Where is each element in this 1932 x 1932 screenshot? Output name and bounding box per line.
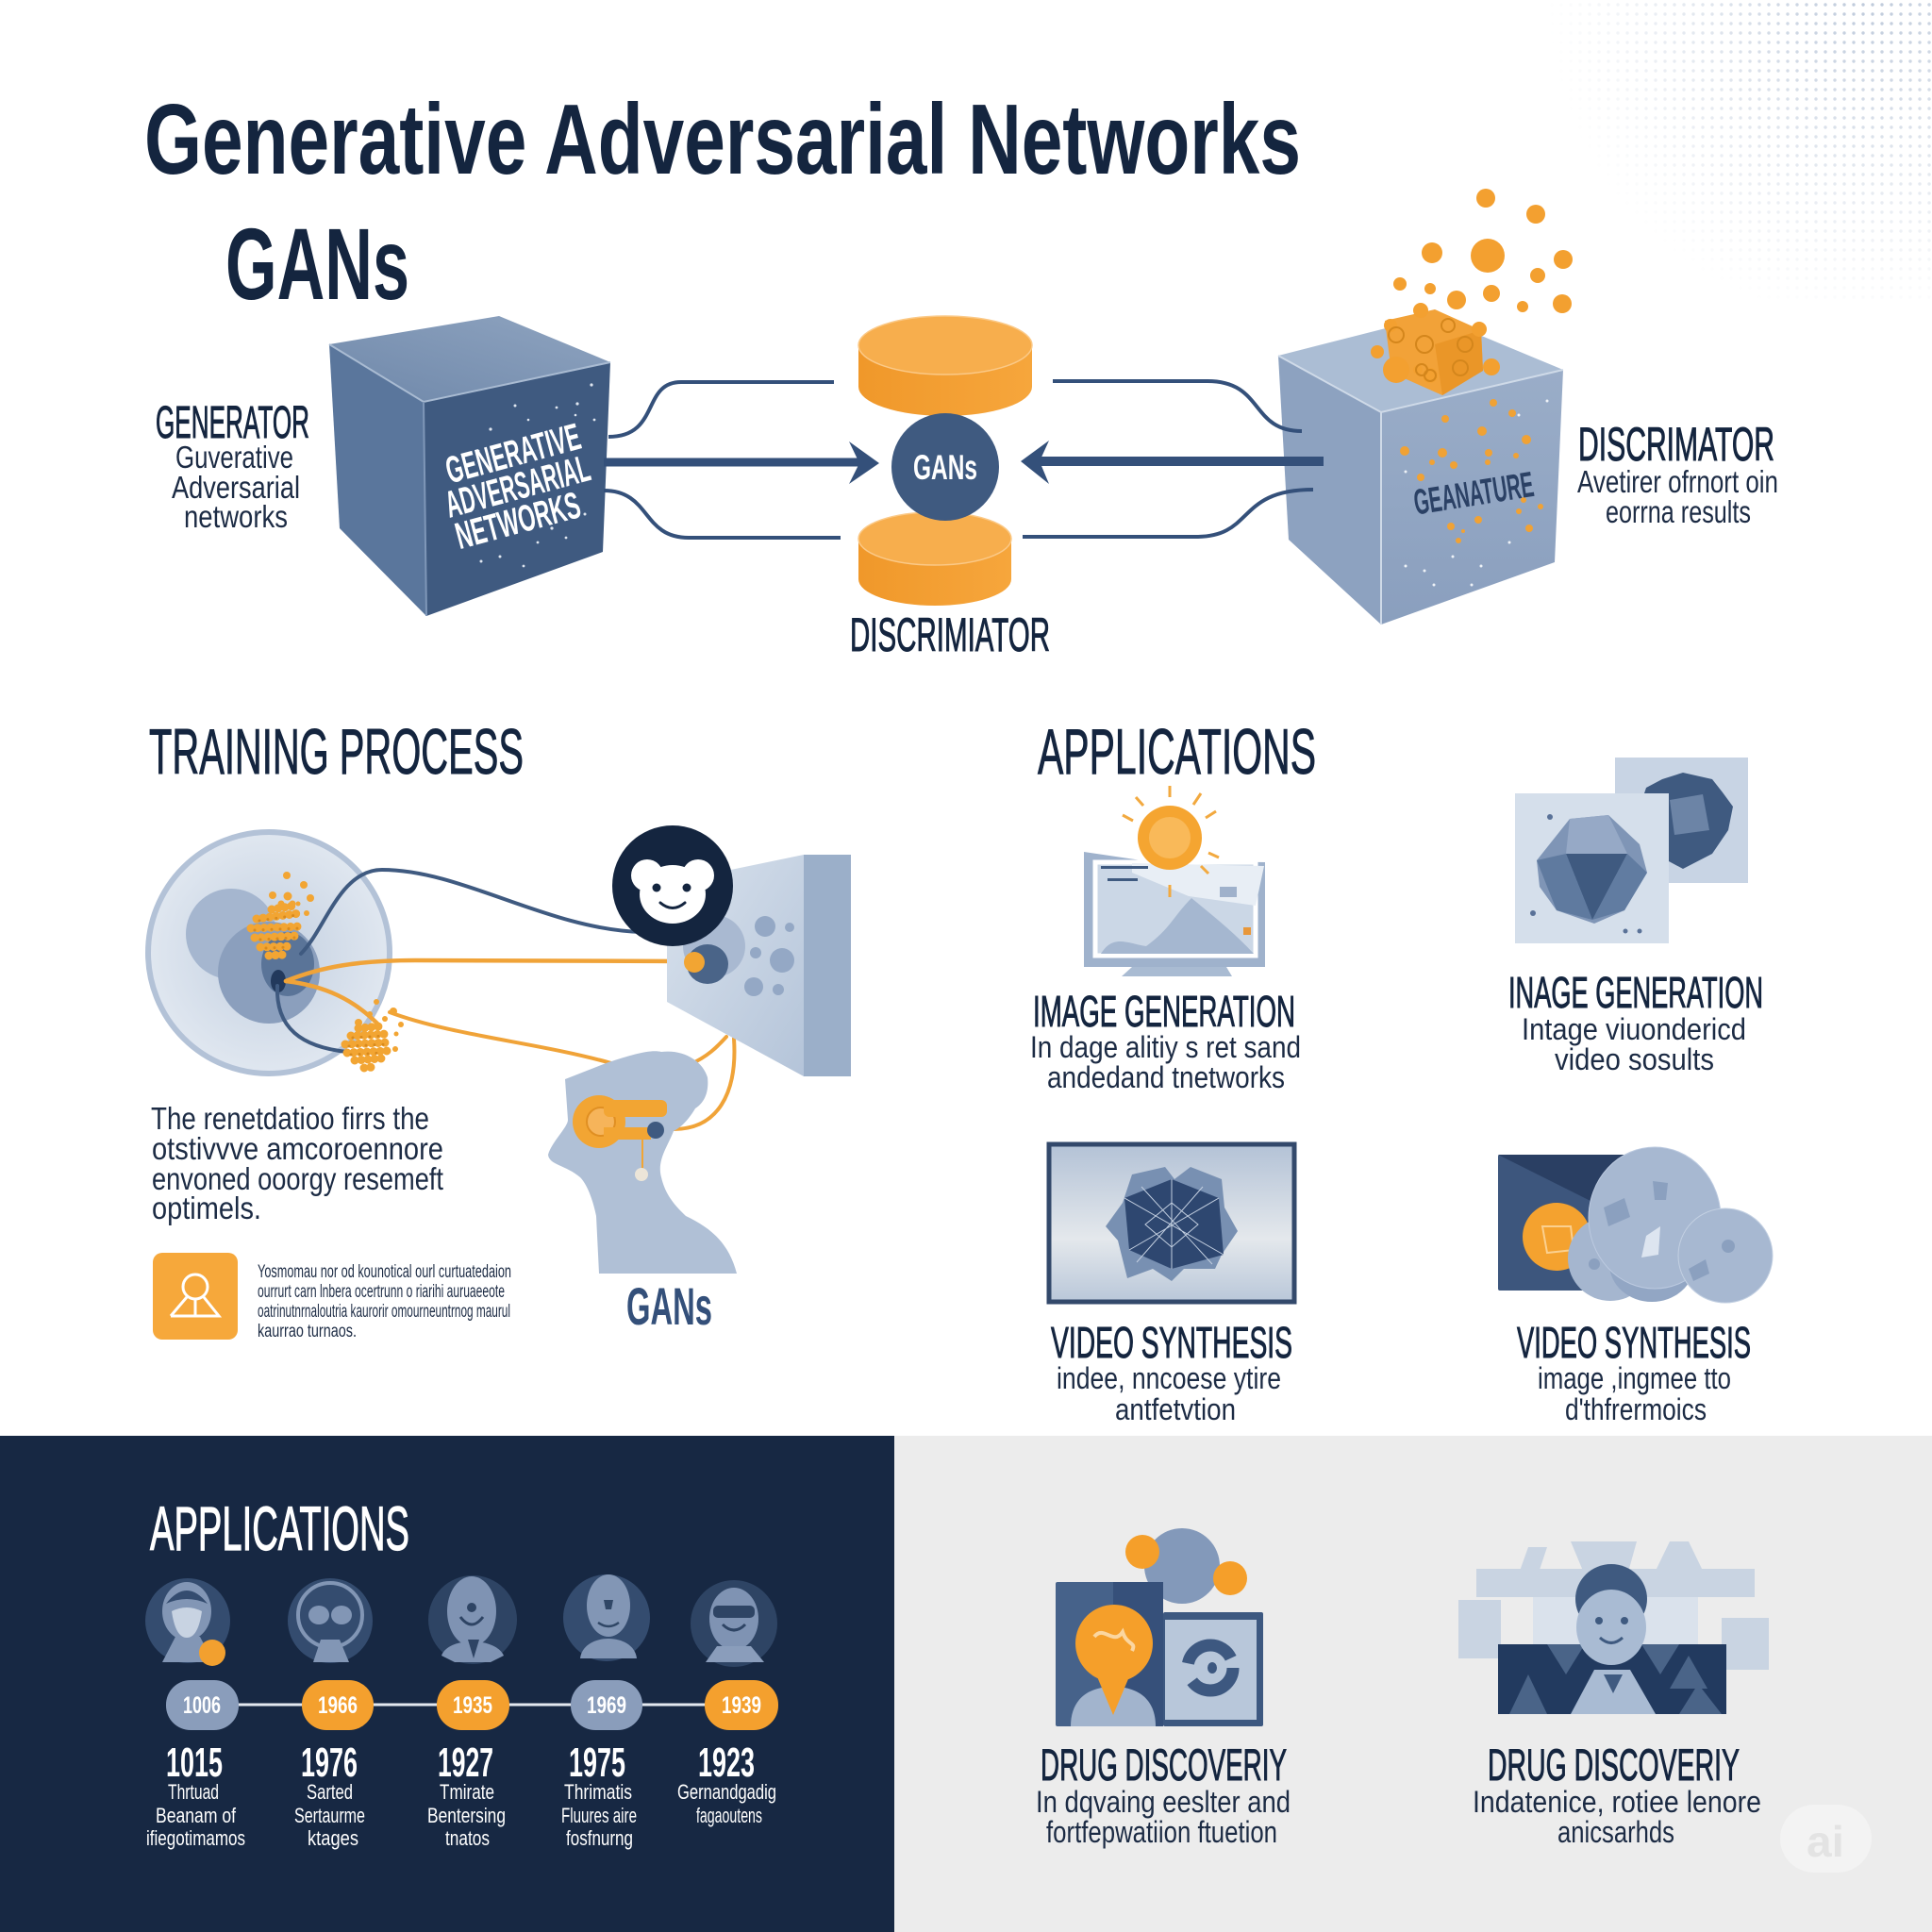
orange particle cluster bottom bbox=[345, 999, 404, 1068]
cube caption: GEANATURE bbox=[1411, 465, 1537, 524]
year pill 3 bbox=[437, 1680, 509, 1730]
timeline entry 5: fagaoutens bbox=[696, 1804, 762, 1827]
image generation text left: IMAGE GENERATION bbox=[1033, 987, 1295, 1036]
avatar 3 bbox=[428, 1575, 517, 1664]
orange data cube and particles bbox=[1371, 189, 1573, 395]
note text: ourrurt carn lnbera ocertrunn o riarihi auruaeeote bbox=[258, 1282, 505, 1302]
video synthesis text left: VIDEO SYNTHESIS bbox=[1051, 1318, 1292, 1367]
timeline entry 4: Fluures aire bbox=[561, 1804, 637, 1827]
drug discovery text right: anicsarhds bbox=[1557, 1815, 1674, 1849]
title: Generative Adversarial Networks bbox=[144, 84, 1301, 195]
avatar 1 bbox=[145, 1578, 230, 1666]
title: GANs bbox=[225, 207, 409, 321]
timeline entry 5: Gernandgadig bbox=[677, 1780, 776, 1804]
image generation text left: andedand tnetworks bbox=[1047, 1060, 1285, 1094]
central GANs discs bbox=[858, 316, 1032, 606]
timeline entry 3: 1927 bbox=[438, 1740, 493, 1786]
year pill 5 bbox=[705, 1680, 778, 1730]
avatar 5 bbox=[691, 1580, 777, 1667]
drug discovery text right bbox=[1473, 1740, 1761, 1849]
video synthesis text left bbox=[1051, 1318, 1292, 1426]
year pill 1: 1006 bbox=[183, 1692, 221, 1719]
video synthesis text right: image ,ingmee tto bbox=[1538, 1361, 1731, 1395]
discriminator label bbox=[1577, 418, 1778, 529]
note text: kaurrao turnaos. bbox=[258, 1322, 357, 1341]
image generation text right: INAGE GENERATION bbox=[1508, 968, 1763, 1017]
timeline entry 2: 1976 bbox=[301, 1740, 358, 1786]
cube caption: NETWORKS bbox=[451, 485, 585, 558]
drug discovery text left: DRUG DISCOVERIY bbox=[1041, 1740, 1287, 1790]
timeline entry 1: 1015 bbox=[166, 1740, 223, 1786]
watermark badge bbox=[1780, 1805, 1872, 1873]
connectors: discriminator to GANs bbox=[1023, 381, 1313, 537]
video synthesis text left: indee, nncoese ytire bbox=[1057, 1361, 1281, 1395]
image generation text right: video sosults bbox=[1555, 1042, 1714, 1076]
icon: person with mosaic bbox=[1458, 1541, 1769, 1714]
timeline entry 1 bbox=[146, 1740, 245, 1850]
video synthesis text left: antfetvtion bbox=[1115, 1392, 1236, 1426]
applications heading: APPLICATIONS bbox=[1038, 716, 1316, 788]
GANs label: GANs bbox=[626, 1276, 712, 1336]
orange particle cluster top bbox=[251, 872, 314, 956]
generator cube bbox=[329, 316, 610, 616]
timeline entry 3 bbox=[427, 1740, 506, 1850]
connectors: generator to GANs bbox=[604, 382, 879, 538]
cube caption: ADVERSARIAL bbox=[441, 448, 594, 526]
training heading: TRAINING PROCESS bbox=[149, 716, 524, 788]
drug discovery text right: DRUG DISCOVERIY bbox=[1488, 1740, 1740, 1790]
panel: drug discovery bbox=[894, 1436, 1932, 1932]
timeline entry 2: Sarted bbox=[307, 1780, 353, 1804]
central GANs discs: GANs bbox=[913, 448, 977, 487]
generator label: networks bbox=[184, 499, 288, 534]
watermark badge: ai bbox=[1807, 1817, 1844, 1866]
panel: training process bbox=[148, 716, 851, 1341]
timeline entry 3: Tmirate bbox=[440, 1780, 494, 1804]
central discriminator label: DISCRIMIATOR bbox=[850, 608, 1050, 661]
note text: Yosmomau nor od kounotical ourl curtuatedaion bbox=[258, 1262, 511, 1282]
generator label: Adversarial bbox=[172, 470, 300, 505]
icon: drug discovery tiles bbox=[1056, 1528, 1263, 1726]
training description: The renetdatioo firrs the bbox=[151, 1101, 429, 1136]
discriminator cube bbox=[1278, 316, 1563, 625]
training description: otstivvve amcoroennore bbox=[152, 1131, 443, 1166]
image generation text left: In dage alitiy s ret sand bbox=[1030, 1030, 1301, 1064]
avatar 4 bbox=[563, 1574, 650, 1661]
cube caption bbox=[432, 416, 603, 558]
note text: oatrinutnrnaloutria kaurorir omourneuntrnog maurul bbox=[258, 1302, 510, 1322]
year pill 2 bbox=[302, 1680, 374, 1730]
year pill 3: 1935 bbox=[453, 1692, 492, 1719]
training description bbox=[151, 1101, 443, 1225]
year pill 4 bbox=[571, 1680, 642, 1730]
timeline entry 4: fosfnurng bbox=[566, 1826, 633, 1850]
drug discovery text right: Indatenice, rotiee lenore bbox=[1473, 1785, 1761, 1819]
timeline track bbox=[166, 1680, 778, 1730]
video synthesis text right: VIDEO SYNTHESIS bbox=[1517, 1318, 1751, 1367]
year pill 5: 1939 bbox=[722, 1692, 761, 1719]
training connectors bbox=[277, 870, 734, 1129]
timeline entry 2: ktages bbox=[308, 1826, 358, 1850]
year pill 2: 1966 bbox=[318, 1692, 358, 1719]
drug discovery text left: fortfepwatiion ftuetion bbox=[1046, 1815, 1277, 1849]
video synthesis text right bbox=[1517, 1318, 1751, 1426]
generator label bbox=[156, 398, 309, 534]
timeline entry 4: 1975 bbox=[569, 1740, 625, 1786]
title bbox=[144, 84, 1301, 321]
discriminator wall bbox=[667, 855, 851, 1076]
icon: smiling face badge bbox=[612, 825, 733, 946]
image generation text left bbox=[1030, 987, 1301, 1094]
generator label: Guverative bbox=[175, 440, 293, 475]
timeline entry 1: Thrtuad bbox=[168, 1780, 219, 1804]
generator label: GENERATOR bbox=[156, 398, 309, 448]
head silhouette with sensor bbox=[548, 1051, 737, 1274]
panel: applications bbox=[1030, 716, 1773, 1426]
discriminator label: eorrna results bbox=[1606, 494, 1751, 529]
discriminator label: DISCRIMATOR bbox=[1578, 418, 1774, 471]
note text bbox=[258, 1262, 511, 1341]
timeline entry 1: ifiegotimamos bbox=[146, 1826, 245, 1850]
timeline entry 2: Sertaurme bbox=[294, 1804, 365, 1827]
timeline entry 5: 1923 bbox=[698, 1740, 755, 1786]
timeline entry 5 bbox=[677, 1740, 776, 1827]
avatar 2 bbox=[288, 1578, 373, 1663]
timeline entry 1: Beanam of bbox=[156, 1804, 237, 1827]
icon: video envelope and spheres bbox=[1498, 1147, 1773, 1303]
year pill 4: 1969 bbox=[587, 1692, 626, 1719]
icon: image generation monitor and sun bbox=[1084, 786, 1265, 976]
timeline entry 4 bbox=[561, 1740, 637, 1850]
icon: orange user tile bbox=[153, 1253, 238, 1340]
training description: optimels. bbox=[152, 1191, 261, 1225]
icon: polyhedra image tiles bbox=[1515, 758, 1748, 943]
timeline entry 4: Thrimatis bbox=[564, 1780, 632, 1804]
timeline entry 3: tnatos bbox=[445, 1826, 490, 1850]
drug discovery text left: In dqvaing eeslter and bbox=[1036, 1785, 1291, 1819]
timeline heading: APPLICATIONS bbox=[150, 1493, 409, 1563]
discriminator label: Avetirer ofrnort oin bbox=[1577, 464, 1778, 499]
image generation text right bbox=[1508, 968, 1763, 1076]
panel: dark timeline bbox=[0, 1436, 894, 1932]
drug discovery text left bbox=[1036, 1740, 1291, 1849]
timeline entry 3: Bentersing bbox=[427, 1804, 506, 1827]
panel: GAN architecture bbox=[156, 189, 1778, 661]
image generation text right: Intage viuondericd bbox=[1522, 1012, 1746, 1046]
timeline entry 2 bbox=[294, 1740, 365, 1850]
generator disc diagram bbox=[148, 832, 390, 1074]
year pill 1 bbox=[166, 1680, 239, 1730]
icon: video frame with crystal bbox=[1049, 1144, 1294, 1302]
arrow: discriminator to GANs bbox=[1021, 441, 1324, 484]
cube caption: GENERATIVE bbox=[441, 416, 585, 491]
video synthesis text right: d'thfrermoics bbox=[1565, 1392, 1707, 1426]
training description: envoned ooorgy resemeft bbox=[152, 1161, 443, 1196]
